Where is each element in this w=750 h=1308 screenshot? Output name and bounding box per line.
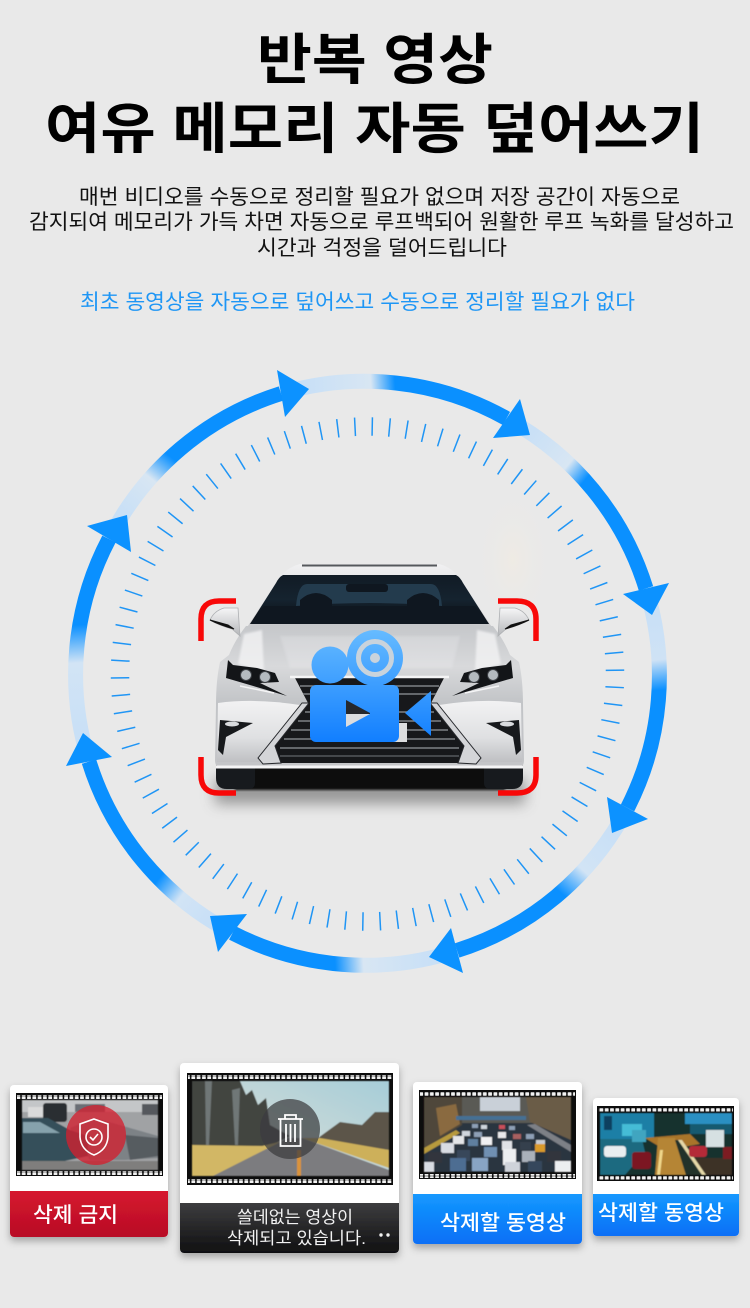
mirrors [210,608,529,636]
label: 삭제할 동영상 [598,1202,724,1225]
title: 반복 영상 [257,29,493,91]
bumper line [216,766,523,768]
spindle grille [275,678,464,763]
film frame [419,1090,576,1179]
label: 삭제되고 있습니다. [227,1229,366,1248]
description text [29,186,734,260]
icon: trash can in dark circle [260,1099,320,1159]
chrome struts [258,703,481,764]
hood lip [290,676,449,678]
card: video to delete, traffic [413,1082,582,1244]
body [215,623,524,768]
photo: night street [600,1113,732,1175]
photo: traffic [424,1097,571,1172]
lower fender panels [217,701,522,762]
label: 쓸데없는 영상이 [237,1208,353,1227]
icon: video camera [310,630,431,742]
greenhouse [244,564,495,632]
grille slats [280,686,459,756]
arrowheads [66,370,669,973]
film frame [187,1073,393,1185]
film frame [597,1106,734,1181]
play button [346,700,370,727]
arc segments [76,381,659,965]
blue subtitle: 최초 동영상을 자동으로 덮어쓰고 수동으로 정리할 필요가 없다 [80,291,635,314]
film frame [16,1093,163,1176]
description text: 감지되여 메모리가 가득 차면 자동으로 루프백되어 원활한 루프 녹화를 달성하고 [29,211,734,234]
photo: road [192,1081,389,1176]
card: deleting useless video [180,1063,399,1253]
tires [216,765,523,789]
card: do not delete [10,1085,168,1237]
interior [250,584,489,624]
icon: shield in red circle [66,1105,126,1165]
car [210,564,529,804]
loop ring with arrows [66,370,669,973]
label [227,1208,390,1248]
card: video to delete, night street [593,1098,739,1236]
red framing brackets [201,601,536,793]
windshield [250,575,489,624]
photo: crash [22,1100,158,1170]
license plate [345,723,407,742]
headlights [226,660,513,696]
title [45,29,704,160]
description text: 시간과 걱정을 덜어드립니다 [257,237,507,260]
tick ring [120,426,615,922]
ground shadow [215,766,525,804]
hood highlights [238,630,501,672]
label: 삭제할 동영상 [440,1212,566,1235]
roof strip [302,564,437,566]
title: 여유 메모리 자동 덮어쓰기 [45,98,704,160]
description text: 매번 비디오를 수동으로 정리할 필요가 없으며 저장 공간이 자동으로 [79,186,680,209]
fog lamps [218,720,521,755]
label: 삭제 금지 [33,1204,118,1227]
